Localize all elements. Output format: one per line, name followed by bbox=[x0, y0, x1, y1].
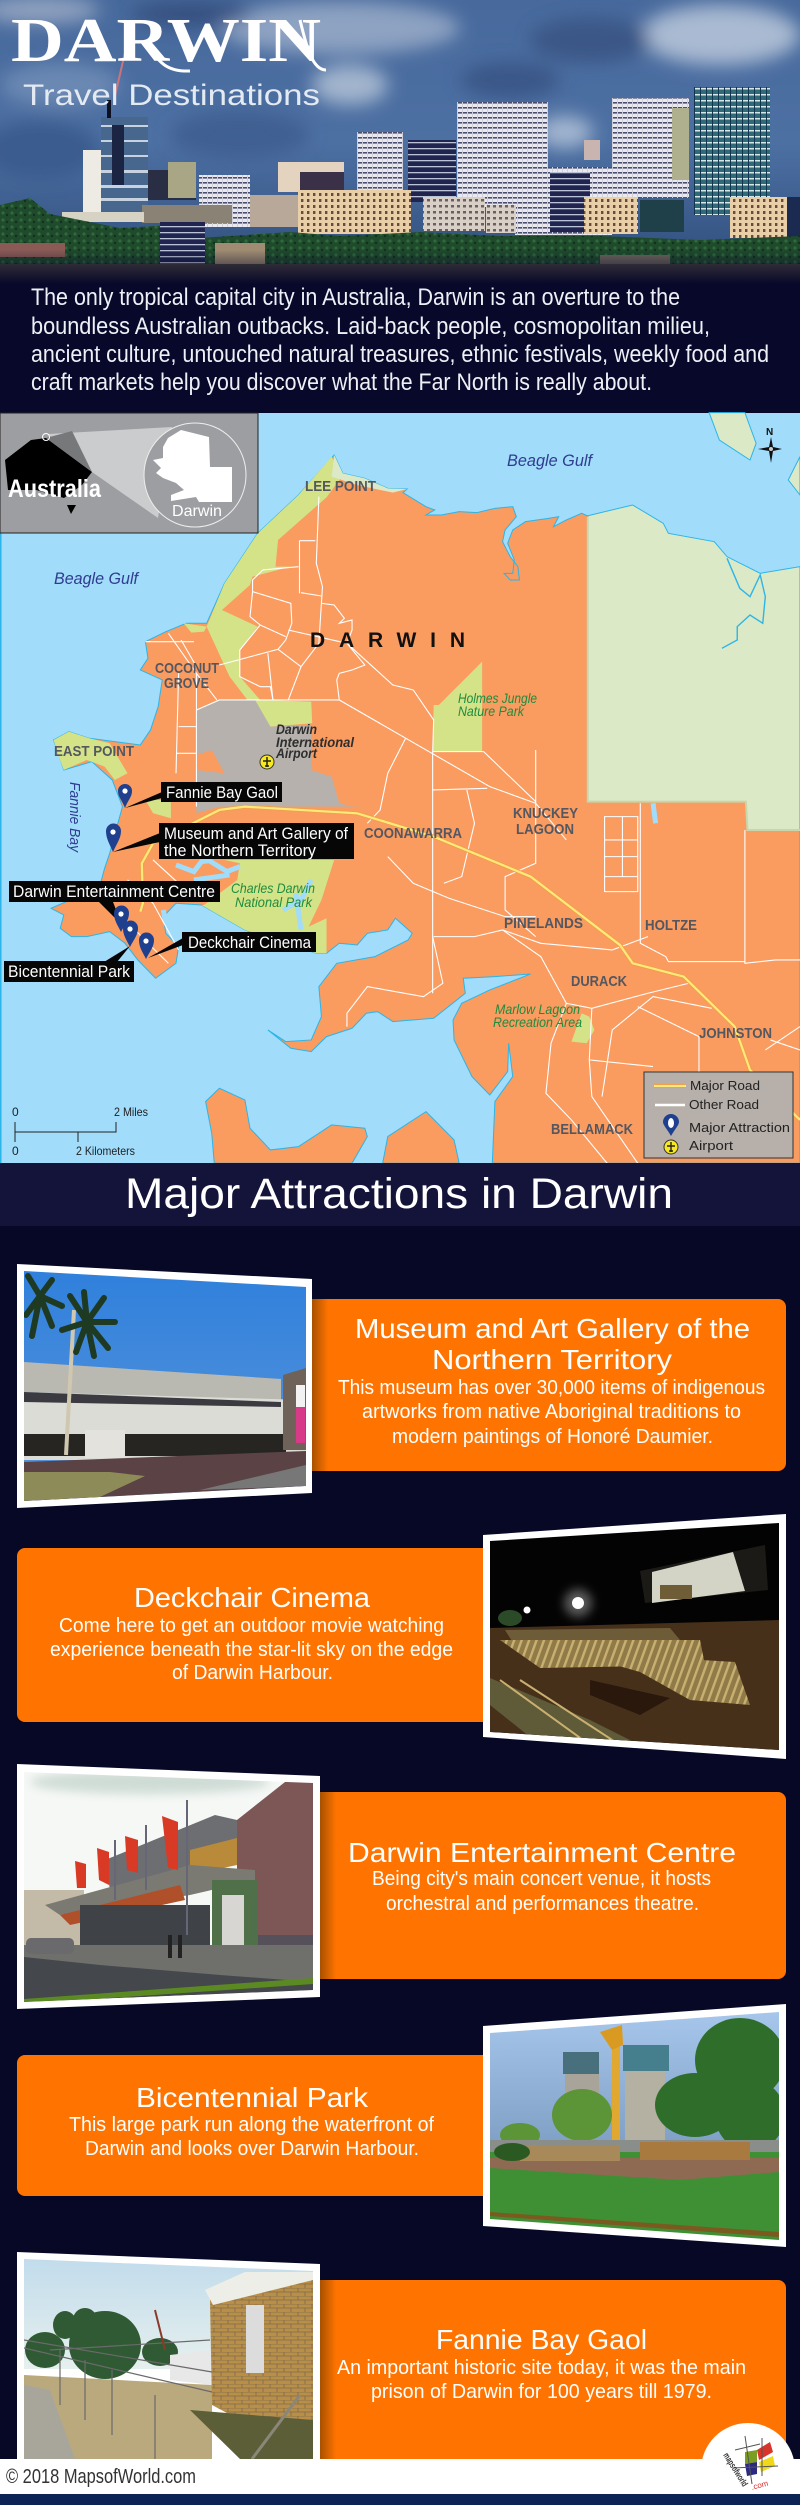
label: Museum and Art Gallery: Museum and Art Gallery of bbox=[164, 824, 348, 843]
place labels: JOHNSTON bbox=[699, 1025, 772, 1042]
label: Museum and Art Gallery bbox=[159, 823, 354, 860]
inset locator map: Australia bbox=[8, 475, 102, 503]
skyline buildings bbox=[62, 44, 800, 238]
place labels: KNUCKEY bbox=[513, 805, 578, 822]
logo: MapsofWorld: mapsofworld bbox=[721, 2451, 750, 2488]
map legend: Major Road bbox=[690, 1078, 760, 1093]
compass bbox=[758, 427, 782, 463]
panel: Museum and Art Gallery bbox=[17, 1264, 786, 1508]
map land shapes bbox=[51, 413, 800, 1163]
label: Darwin Entertainment Centre: Darwin Entertainment Centre bbox=[13, 882, 215, 901]
logo: MapsofWorld: .com bbox=[750, 2479, 770, 2492]
place labels bbox=[54, 478, 772, 1138]
scale bar: 0 bbox=[12, 1105, 19, 1119]
footer bbox=[0, 2459, 800, 2494]
park labels: National Park bbox=[235, 894, 313, 910]
label: Fannie Bay Gaol: Fannie Bay Gaol bbox=[166, 783, 278, 802]
sea labels: Fannie Bay bbox=[66, 782, 83, 853]
sea labels: Beagle Gulf bbox=[507, 451, 594, 470]
scale bar: 0 bbox=[12, 1144, 19, 1158]
inset locator map: Darwin bbox=[172, 503, 222, 520]
text: Fannie Bay description: Fannie Bay Gaol bbox=[436, 2324, 647, 2355]
map roads bbox=[110, 497, 800, 1163]
text: Deckchair description: experience beneath the star-lit sky on the edge bbox=[50, 1639, 453, 1661]
intro text band: The only tropical capital city in Australia, Darwin is an overture to the bbox=[31, 284, 680, 311]
text: Bicentennial description bbox=[69, 2082, 434, 2160]
map legend: Major Attraction bbox=[689, 1120, 790, 1135]
heading: Major Attractions in Darwin bbox=[0, 1163, 800, 1226]
label: Deckchair Cinema: Deckchair Cinema bbox=[188, 933, 311, 952]
text: Deckchair description: Come here to get an outdoor movie watching bbox=[59, 1615, 444, 1637]
map legend: Airport bbox=[689, 1138, 733, 1153]
text: Bicentennial description: Bicentennial Park bbox=[136, 2082, 369, 2113]
place labels: DURACK bbox=[571, 973, 627, 990]
panel: Bicentennial Park bbox=[17, 2004, 786, 2252]
photo: outdoor cinema bbox=[483, 1514, 786, 1759]
place labels: COCONUT bbox=[155, 660, 219, 677]
scale bar: 2 Miles bbox=[114, 1105, 148, 1119]
footer navy bar bbox=[0, 2494, 800, 2505]
text: Bicentennial description: Darwin and looks over Darwin Harbour. bbox=[85, 2138, 419, 2160]
airport label and icon: Darwin bbox=[276, 721, 317, 737]
text: Deckchair description bbox=[50, 1582, 453, 1684]
photo: entertainment centre bbox=[17, 1764, 320, 2009]
intro text band bbox=[0, 284, 800, 413]
place labels: PINELANDS bbox=[504, 915, 583, 932]
heading: Major Attractions in Darwin: Major Attractions in Darwin bbox=[125, 1170, 673, 1218]
text: Deckchair description: Deckchair Cinema bbox=[134, 1582, 370, 1613]
text: Bicentennial description: This large park run along the waterfront of bbox=[69, 2114, 434, 2136]
map legend: Other Road bbox=[689, 1097, 759, 1112]
text: Fannie Bay description bbox=[337, 2324, 746, 2403]
text: Entertainment Centre description: Being city's main concert venue, it hosts bbox=[372, 1868, 711, 1890]
map legend bbox=[644, 1072, 793, 1158]
map pins bbox=[106, 784, 154, 959]
logo: MapsofWorld bbox=[701, 2423, 795, 2505]
text: Museum description: This museum has over 30,000 items of indigenous bbox=[338, 1377, 765, 1399]
sea labels: Beagle Gulf bbox=[54, 569, 140, 588]
park labels: Nature Park bbox=[458, 703, 525, 719]
tree line and foreshore bbox=[0, 198, 800, 280]
place labels: DARWIN bbox=[310, 629, 465, 652]
place labels: COONAWARRA bbox=[364, 825, 462, 842]
text: Museum description: Museum and Art Gallery of the bbox=[355, 1313, 750, 1344]
label: Bicentennial Park: Bicentennial Park bbox=[8, 962, 130, 981]
text: Fannie Bay description: prison of Darwin for 100 years till 1979. bbox=[371, 2381, 712, 2403]
airport label and icon: International bbox=[276, 734, 355, 750]
text: Entertainment Centre description: orchestral and performances theatre. bbox=[386, 1893, 699, 1915]
park labels: Marlow Lagoon bbox=[495, 1001, 580, 1017]
text: Museum description: Northern Territory bbox=[432, 1344, 672, 1375]
text: Deckchair description: of Darwin Harbour. bbox=[172, 1662, 333, 1684]
intro text band: craft markets help you discover what the Far North is really about. bbox=[31, 369, 652, 396]
place labels: GROVE bbox=[164, 675, 209, 692]
intro text band: boundless Australian outbacks. Laid-back people, cosmopolitan milieu, bbox=[31, 313, 710, 340]
scale bar bbox=[12, 1105, 148, 1158]
park labels: Charles Darwin bbox=[231, 880, 315, 896]
park labels bbox=[231, 690, 582, 1030]
park labels: Holmes Jungle bbox=[458, 690, 537, 706]
scale bar: 2 Kilometers bbox=[76, 1144, 135, 1158]
label: Museum and Art Gallery: the Northern Territory bbox=[164, 841, 316, 860]
airport label and icon: Airport bbox=[275, 745, 318, 761]
map water bbox=[0, 413, 800, 1163]
title: DARWIN: DARWIN bbox=[11, 7, 321, 75]
photo: museum building bbox=[17, 1264, 312, 1508]
leader lines bbox=[99, 792, 183, 962]
sea labels bbox=[54, 451, 594, 853]
major road bbox=[140, 807, 800, 1120]
place labels: LAGOON bbox=[516, 821, 574, 838]
text: Museum description: modern paintings of Honoré Daumier. bbox=[392, 1426, 713, 1448]
inset locator map bbox=[0, 413, 258, 533]
place labels: BELLAMACK bbox=[551, 1121, 633, 1138]
airport label and icon bbox=[260, 721, 355, 769]
subtitle: Travel Destinations: Travel Destinations bbox=[23, 79, 320, 112]
text: Entertainment Centre description bbox=[348, 1837, 736, 1915]
panel: Fannie Bay Gaol bbox=[17, 2252, 786, 2460]
panel: Deckchair Cinema bbox=[17, 1514, 786, 1759]
text: Entertainment Centre description: Darwin Entertainment Centre bbox=[348, 1837, 736, 1868]
map of Darwin bbox=[0, 413, 800, 1163]
header: city skyline photo bbox=[0, 0, 800, 290]
inlets bbox=[163, 803, 656, 930]
place labels: LEE POINT bbox=[305, 478, 376, 495]
place labels: EAST POINT bbox=[54, 743, 134, 760]
park labels: Recreation Area bbox=[493, 1014, 582, 1030]
photo: gaol bbox=[17, 2252, 320, 2460]
panel: Darwin Entertainment Centre bbox=[17, 1764, 786, 2009]
place labels: HOLTZE bbox=[645, 917, 697, 934]
text: Museum description: artworks from native Aboriginal traditions to bbox=[362, 1401, 741, 1423]
text: Fannie Bay description: An important historic site today, it was the main bbox=[337, 2357, 746, 2379]
text: Museum description bbox=[338, 1313, 765, 1448]
footer: © 2018 MapsofWorld.com bbox=[6, 2466, 196, 2488]
photo: park bbox=[483, 2004, 786, 2252]
compass: N bbox=[766, 427, 773, 438]
